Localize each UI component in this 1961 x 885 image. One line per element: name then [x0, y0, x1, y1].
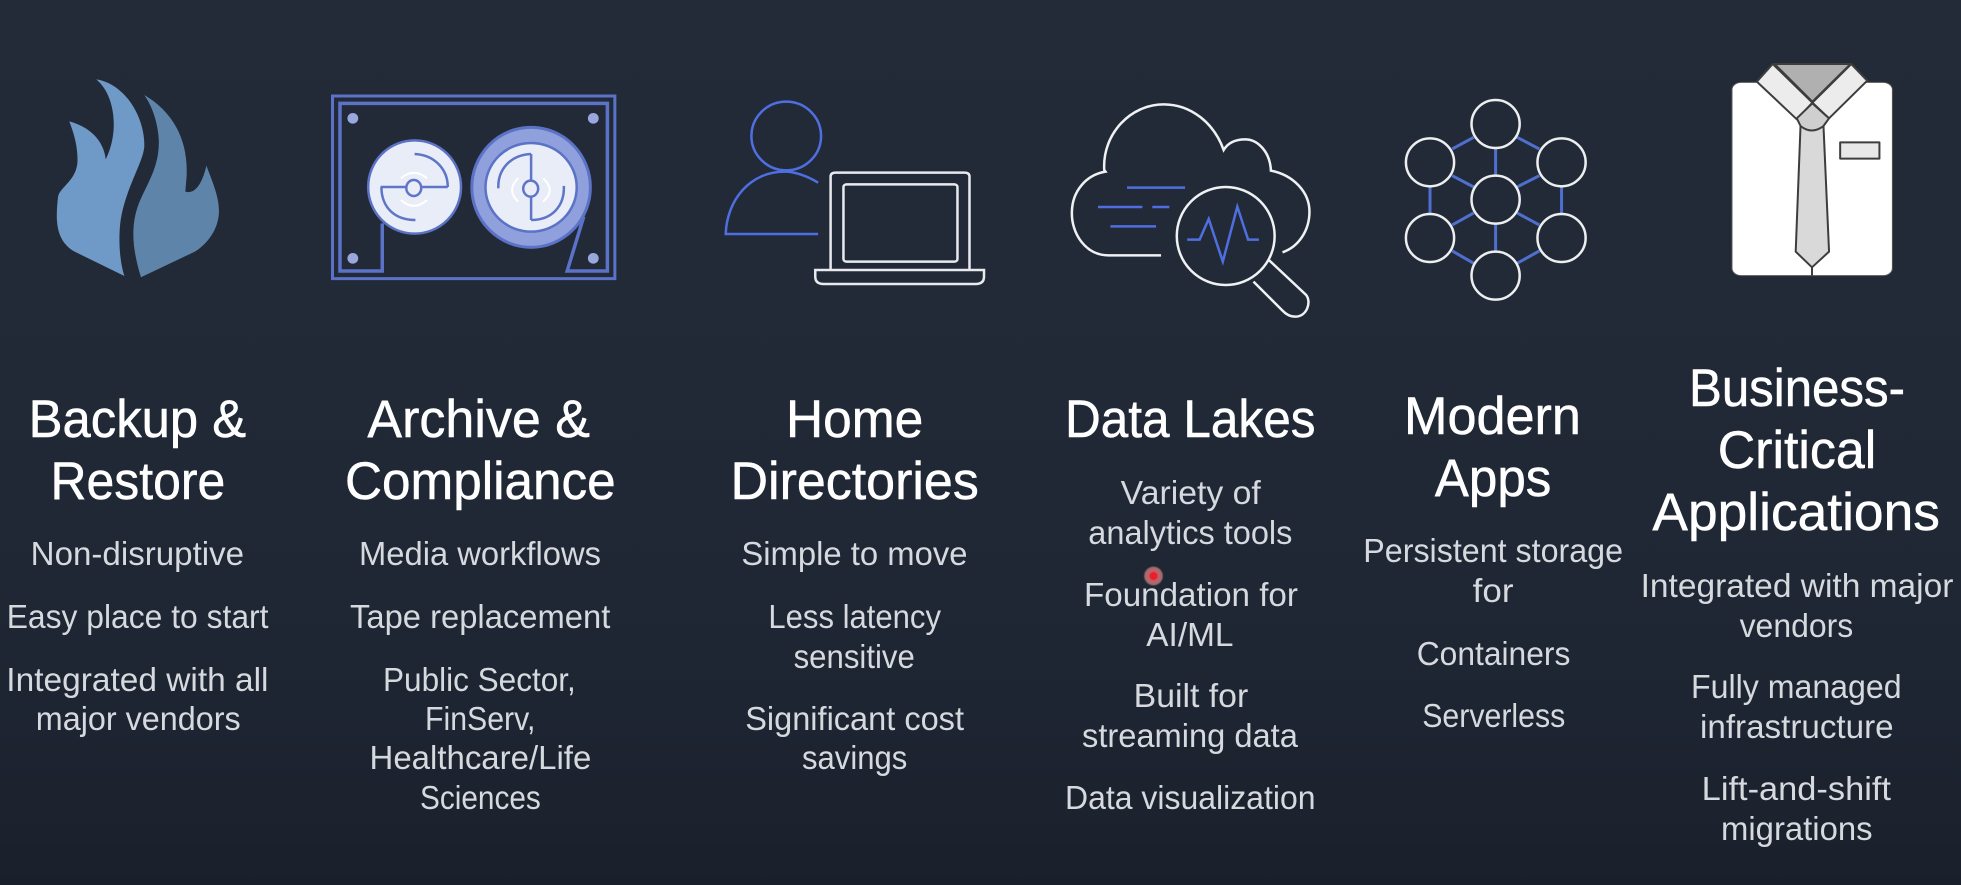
pointer: red laser dot — [1144, 566, 1164, 586]
text: business-critical points: migrations — [1721, 810, 1873, 847]
text: data lake points: Foundation for — [1084, 576, 1298, 613]
text: data lake points: streaming data — [1082, 717, 1299, 754]
heading: Archive & Compliance: Compliance — [345, 452, 616, 511]
text: archive points: Public Sector, — [383, 661, 576, 698]
heading: Home Directories: Home — [786, 390, 923, 449]
text: modern apps points: for — [1473, 572, 1514, 609]
text: modern apps points: Persistent storage — [1363, 532, 1623, 569]
icon: tape reels — [333, 96, 615, 279]
text: data lake points: Built for — [1134, 677, 1248, 714]
text: modern apps points — [1363, 532, 1623, 734]
heading: Modern Apps — [1404, 387, 1581, 508]
text: data lake points: AI/ML — [1146, 616, 1234, 653]
text: backup points: Non-disruptive — [31, 535, 244, 572]
heading: Backup & Restore: Backup & — [29, 390, 246, 449]
text: archive points: Tape replacement — [350, 598, 610, 635]
text: archive points: Media workflows — [359, 535, 601, 572]
text: business-critical points: Integrated with major — [1641, 567, 1953, 604]
text: data lake points: Variety of — [1121, 474, 1262, 511]
heading: Business-Critical Applications: Applications — [1652, 483, 1940, 542]
icon: flame — [57, 79, 219, 277]
text: backup points: major vendors — [36, 700, 241, 737]
icon: node network — [1406, 100, 1586, 300]
panel: backup and restore — [6, 79, 269, 737]
text: business-critical points — [1641, 567, 1953, 847]
text: home directory points: savings — [802, 739, 907, 776]
text: home directory points: Significant cost — [745, 700, 964, 737]
text: home directory points: Less latency — [768, 598, 941, 635]
text: data lake points: Data visualization — [1065, 779, 1316, 816]
text: data lake points: analytics tools — [1088, 514, 1292, 551]
text: archive points: Healthcare/Life — [370, 739, 591, 776]
text: modern apps points: Containers — [1417, 635, 1570, 672]
text: home directory points: Simple to move — [741, 535, 968, 572]
icon: shirt and tie — [1732, 64, 1892, 276]
heading: Home Directories — [730, 390, 979, 511]
heading: Archive & Compliance — [345, 390, 616, 511]
heading: Modern Apps: Modern — [1404, 387, 1581, 446]
text: archive points: Sciences — [420, 779, 541, 816]
panel: modern apps — [1363, 100, 1623, 734]
panel: data lakes — [1065, 104, 1316, 816]
heading: Business-Critical Applications: Critical — [1718, 421, 1876, 480]
icon: person with laptop — [726, 102, 984, 284]
text: business-critical points: Fully managed — [1691, 668, 1902, 705]
panel: business-critical applications — [1641, 64, 1953, 847]
text: archive points: FinServ, — [425, 700, 535, 737]
text: home directory points — [741, 535, 968, 776]
heading: Backup & Restore — [29, 390, 246, 511]
heading: Home Directories: Directories — [730, 452, 979, 511]
text: home directory points: sensitive — [794, 638, 915, 675]
text: business-critical points: infrastructure — [1700, 708, 1894, 745]
heading: Data Lakes: Data Lakes — [1065, 390, 1316, 449]
text: backup points: Easy place to start — [7, 598, 268, 635]
text: data lake points — [1065, 474, 1316, 816]
heading: Archive & Compliance: Archive & — [367, 390, 590, 449]
panel: home directories — [726, 102, 984, 776]
text: modern apps points: Serverless — [1422, 697, 1565, 734]
icon: cloud with magnifier — [1072, 104, 1309, 317]
heading: Backup & Restore: Restore — [50, 452, 225, 511]
text: backup points — [6, 535, 269, 737]
text: backup points: Integrated with all — [6, 661, 269, 698]
heading: Business-Critical Applications — [1652, 359, 1940, 542]
text: business-critical points: Lift-and-shift — [1702, 770, 1891, 807]
heading: Modern Apps: Apps — [1435, 449, 1551, 508]
text: business-critical points: vendors — [1740, 607, 1853, 644]
panel: archive and compliance — [333, 96, 616, 816]
heading: Business-Critical Applications: Business- — [1689, 359, 1905, 418]
text: archive points — [350, 535, 610, 816]
